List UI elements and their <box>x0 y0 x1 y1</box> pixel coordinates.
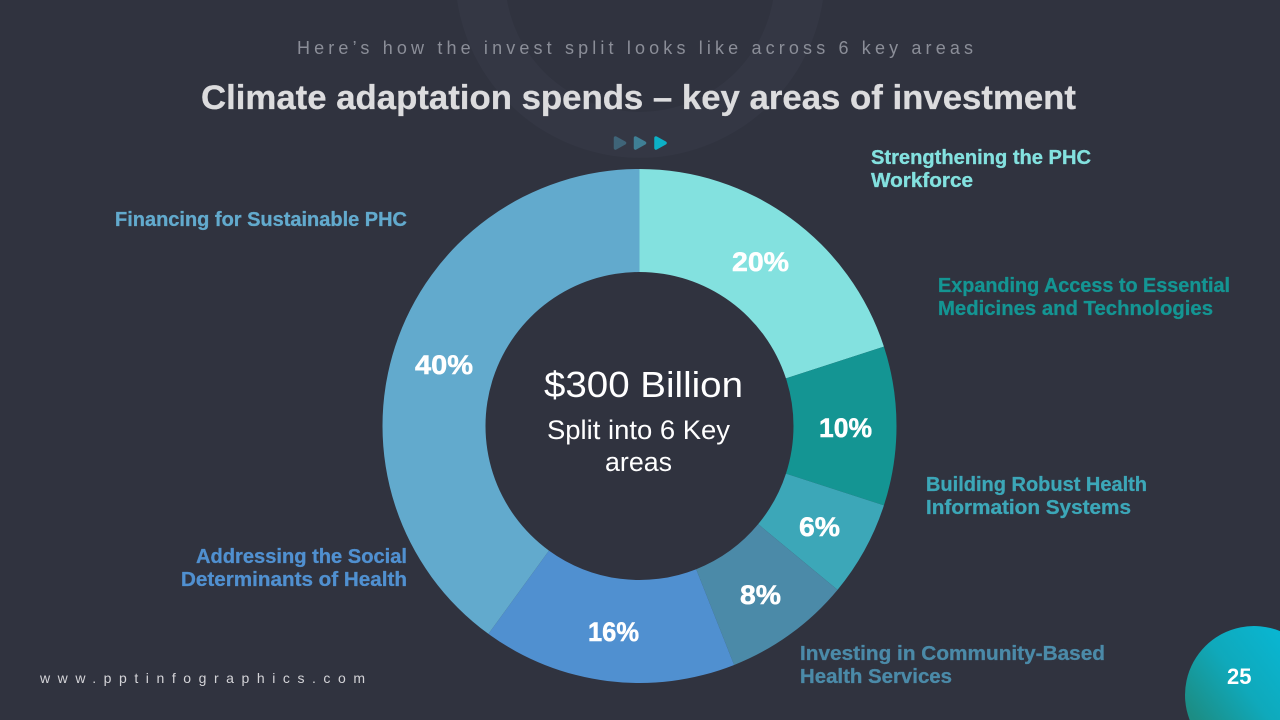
label: Financing for Sustainable PHC: Financing for Sustainable PHC <box>115 209 407 231</box>
title: Climate adaptation spends – key areas of investment <box>201 79 1076 117</box>
label: Expanding Access: Medicines and Technologies <box>938 298 1213 320</box>
center caption <box>547 415 730 477</box>
center caption: Split into 6 Key <box>547 415 730 445</box>
segment: 20% Strengthening the PHC Workforce <box>640 169 884 378</box>
percentage: 40%: 40% <box>415 350 473 380</box>
segment: 40% Financing <box>382 169 640 634</box>
page number badge: 25 <box>1227 664 1251 689</box>
segment: 10% Essential Medicines <box>786 347 896 505</box>
label: Addressing the Social Determinants of Health: Determinants of Health <box>181 569 407 591</box>
label: Investing in Community-Based Health Services <box>800 643 1105 688</box>
label: Strengthening the PHC Workforce <box>871 147 1091 192</box>
label: Strengthening the PHC Workforce: Strengthening the PHC <box>871 147 1091 169</box>
label: Building Robust Health Information Systems <box>926 474 1147 519</box>
percentage: 8%: 8% <box>740 580 781 610</box>
label: Investing in Community-Based Health Services: Investing in Community-Based <box>800 643 1105 665</box>
label: Strengthening the PHC Workforce: Workforce <box>871 170 973 192</box>
page number badge <box>1185 626 1280 720</box>
website footer: www.pptinfographics.com <box>39 670 365 686</box>
label: Building Robust Health Information Systems: Building Robust Health <box>926 474 1147 496</box>
percentage: 16%: 16% <box>588 617 639 647</box>
center total: $300 Billion <box>544 364 743 405</box>
icon: three play arrows <box>616 138 665 148</box>
decorative ring behind title <box>457 0 823 158</box>
label: Expanding Access: Expanding Access to Essential <box>938 275 1230 297</box>
percentage: 20%: 20% <box>732 247 789 277</box>
segment: 16% Social Determinants <box>488 551 734 683</box>
percentage: 10%: 10% <box>819 413 872 443</box>
percentage: 6%: 6% <box>799 512 840 542</box>
label: Building Robust Health Information Systems: Information Systems <box>926 497 1131 519</box>
donut chart <box>382 169 896 683</box>
label: Investing in Community-Based Health Services: Health Services <box>800 666 952 688</box>
subtitle: Here’s how the invest split looks like across 6 key areas <box>297 38 973 58</box>
label: Addressing the Social Determinants of Health: Addressing the Social <box>196 546 407 568</box>
label: Addressing the Social Determinants of Health <box>181 546 407 591</box>
label: Expanding Access <box>938 275 1230 320</box>
center caption: areas <box>605 447 672 477</box>
segment: 8% Community-Based Services <box>696 524 838 665</box>
segment: 6% Health Information Systems <box>758 474 884 590</box>
